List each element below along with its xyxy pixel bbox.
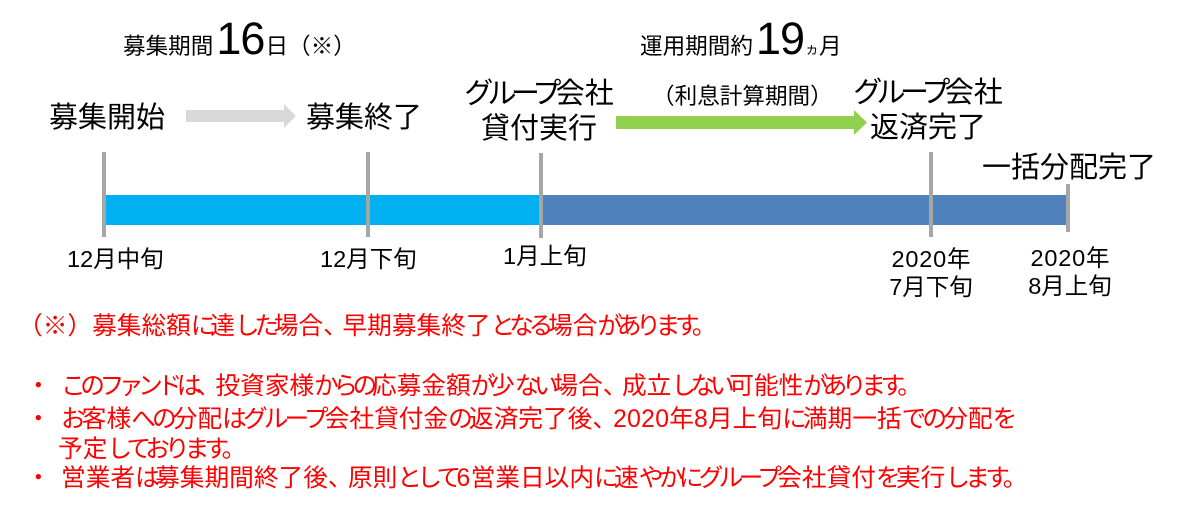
- tick: August early: [1066, 184, 1070, 232]
- bullet note: distribution schedule: [26, 406, 1014, 463]
- bar segment: recruitment: [104, 195, 541, 225]
- label: recruitment end: 募集終了: [306, 102, 422, 134]
- text: ・: [26, 373, 51, 400]
- label: group company loan execution: グループ会社: [464, 78, 614, 110]
- text: ・: [26, 406, 51, 433]
- arrow: recruitment period: [186, 104, 296, 128]
- heading: operating period: 運用期間約19ヵ月: [640, 13, 842, 64]
- label: interest calculation period: （利息計算期間）: [652, 84, 833, 109]
- timeline bar: [102, 152, 1070, 238]
- date: early January: 1月上旬: [503, 243, 587, 269]
- label: lump-sum distribution complete: 一括分配完了: [982, 152, 1156, 184]
- note: early close: （※）募集総額に達した場合、早期募集終了となる場合があります。: [18, 313, 711, 340]
- bullet note: loan execution timing: 営業者は募集期間終了後、原則として6営業日以内に速やかにグループ会社貸付を実行します。: [61, 465, 1023, 492]
- date: early August 2020: 2020年: [1030, 245, 1109, 271]
- bar segment: operation: [541, 195, 1067, 225]
- heading: recruitment period: 募集期間16日（※）: [123, 13, 356, 64]
- date: early August 2020: 8月上旬: [1028, 273, 1112, 299]
- bullet note: fund may not form: このファンドは、投資家様からの応募金額が少ない場合、成立しない可能性があります。: [61, 373, 917, 400]
- date: late July 2020: 2020年: [892, 246, 970, 272]
- tick: December late: [366, 152, 370, 237]
- label: recruitment start: 募集開始: [49, 102, 165, 134]
- label: group company loan execution: 貸付実行: [481, 113, 597, 145]
- label: group company repayment complete: 返済完了: [870, 112, 986, 144]
- date: early August 2020: [1028, 245, 1112, 299]
- label: group company repayment complete: [853, 77, 1003, 144]
- arrow: operating period: [616, 110, 867, 135]
- text: ・: [26, 465, 51, 492]
- date: mid December: 12月中旬: [67, 246, 164, 272]
- bullet note: distribution schedule: 予定しております。: [58, 436, 241, 463]
- tick: January early: [539, 153, 542, 238]
- label: group company loan execution: [464, 78, 614, 145]
- tick: December mid: [102, 152, 106, 237]
- date: late July 2020: [889, 246, 973, 300]
- date: late July 2020: 7月下旬: [889, 274, 973, 300]
- bullet note: distribution schedule: お客様への分配はグループ会社貸付金の返済完了後、2020年8月上旬に満期一括での分配を: [61, 406, 1013, 433]
- label: group company repayment complete: グループ会社: [853, 77, 1003, 109]
- date: late December: 12月下旬: [320, 246, 417, 272]
- tick: July late: [929, 152, 932, 237]
